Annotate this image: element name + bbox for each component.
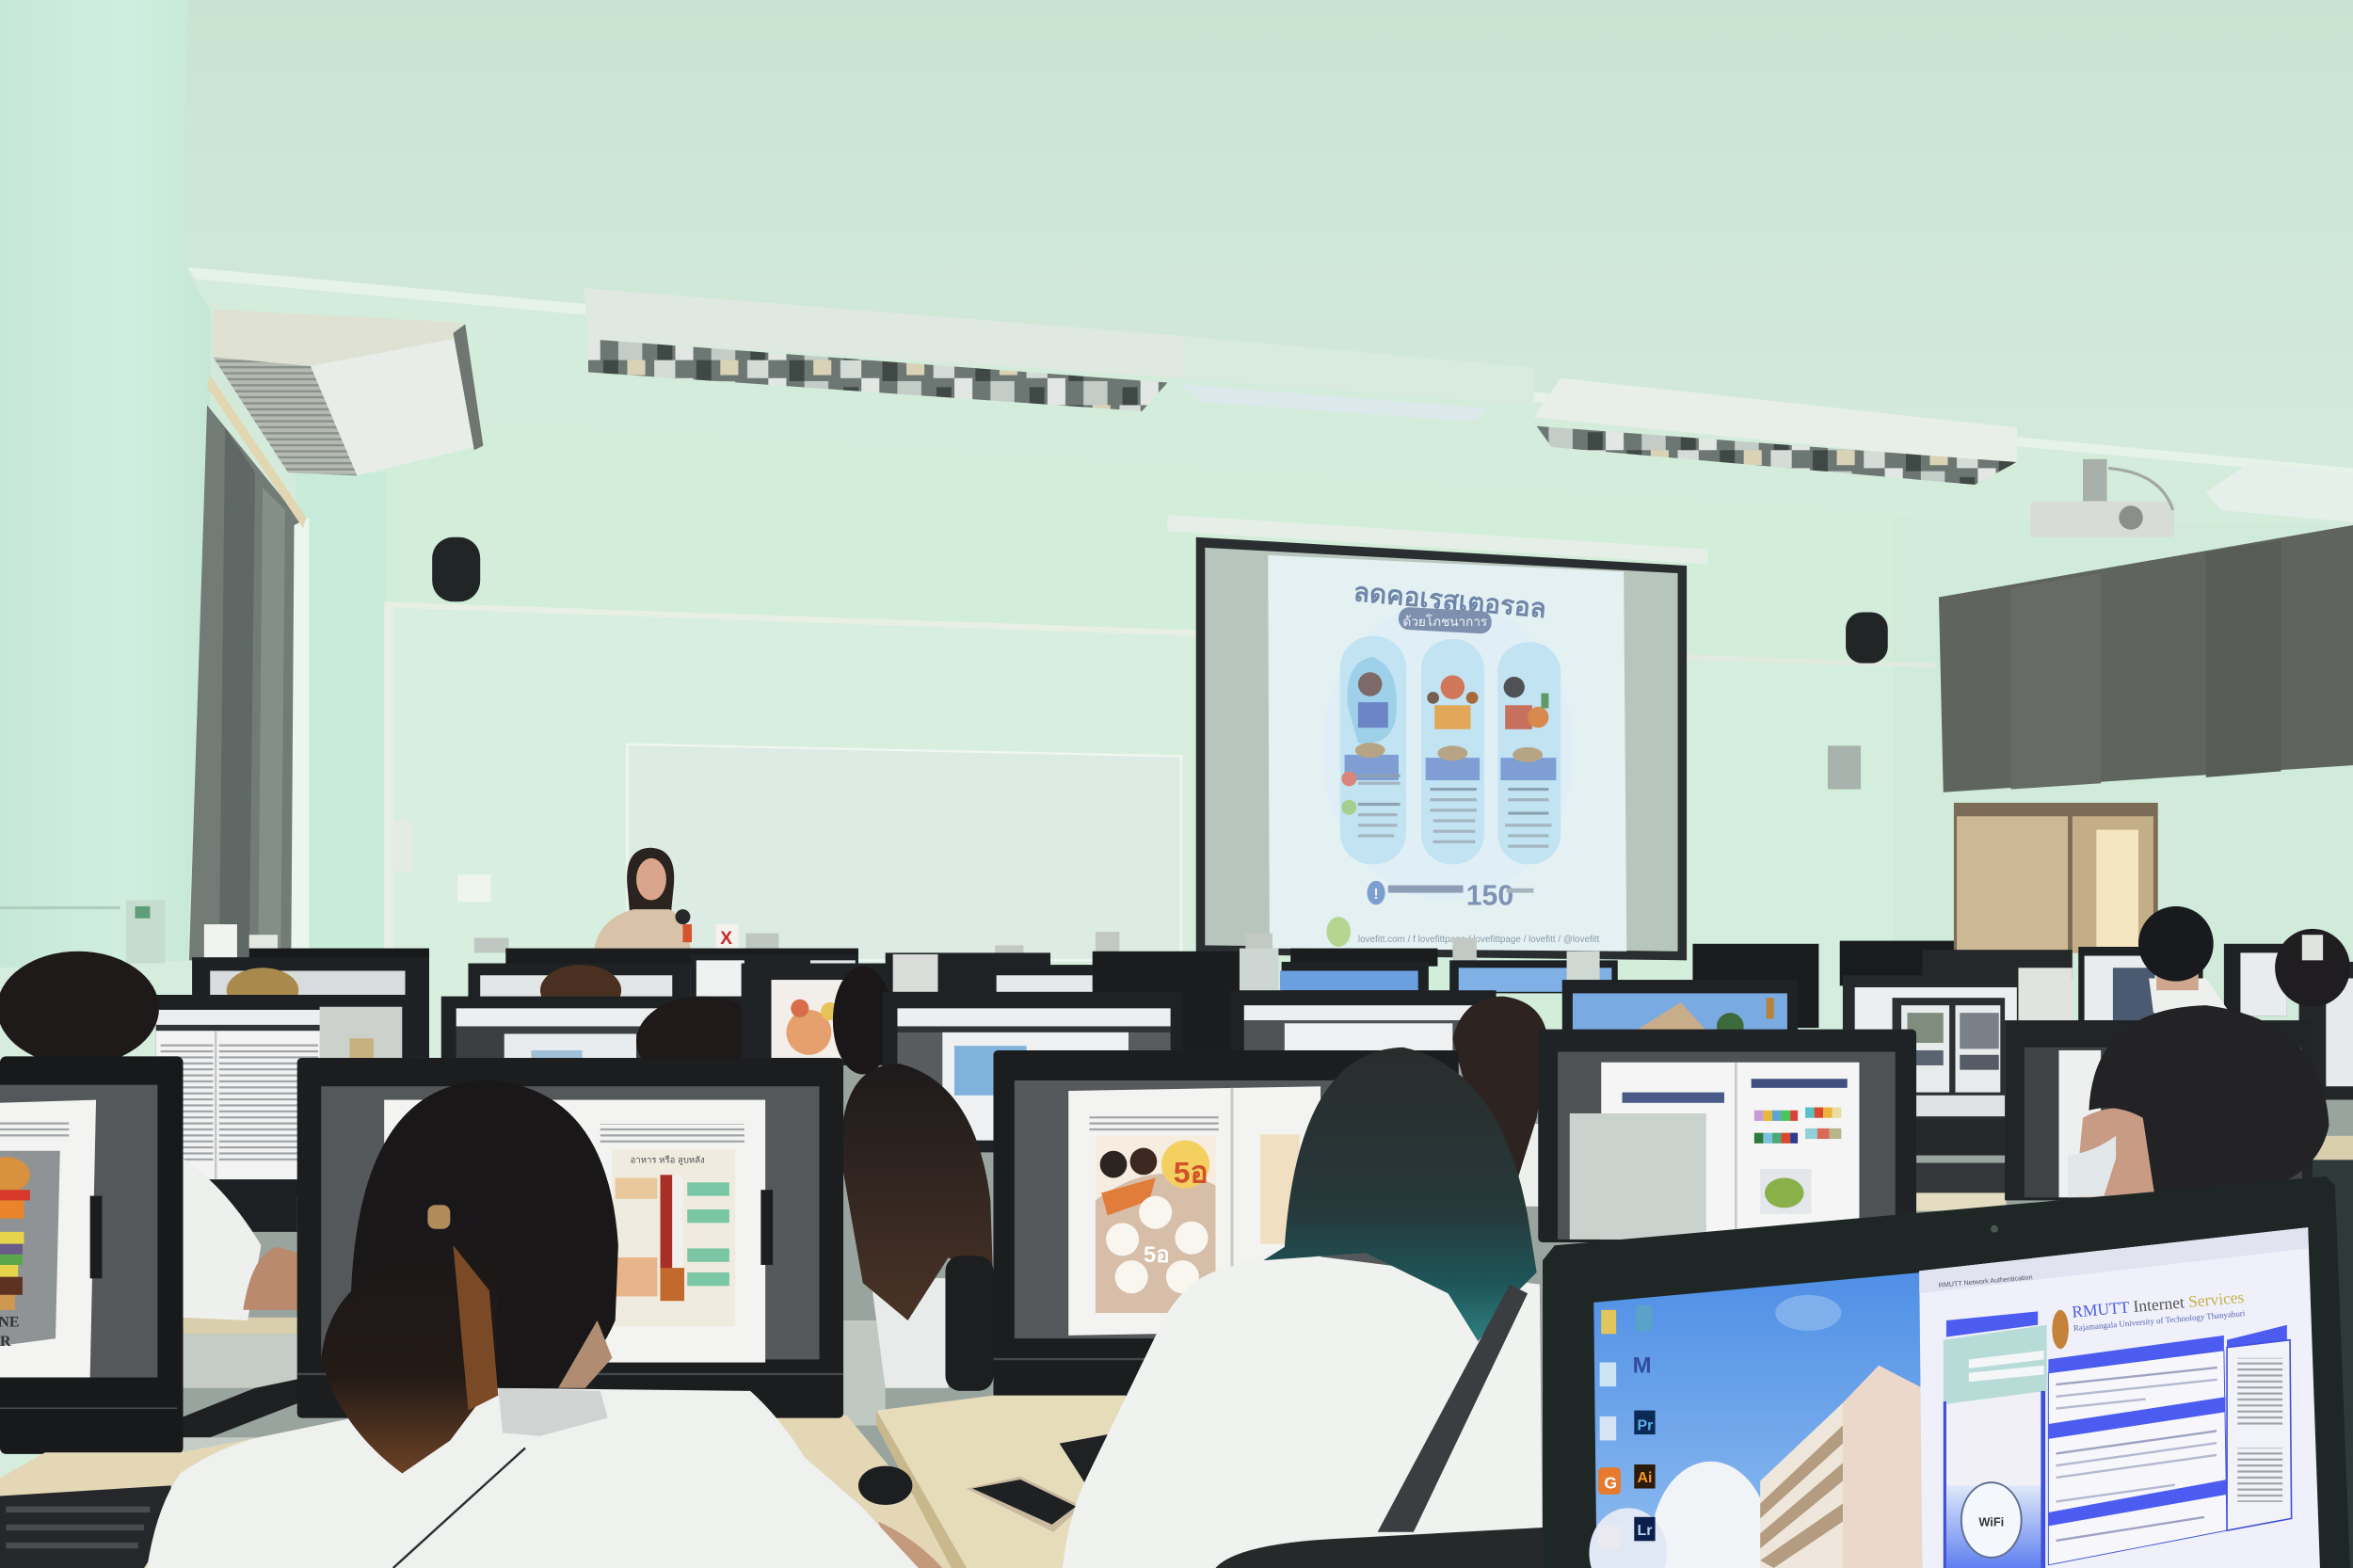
slide subtitle pill: ด้วยโภชนาการ [1403, 614, 1487, 629]
projection screen [1167, 515, 1707, 960]
speaker right [1846, 612, 1888, 664]
main content column [2048, 1336, 2227, 1565]
desktop icons: Pr [1637, 1417, 1653, 1433]
salad plate [1760, 1169, 1811, 1214]
speaker left [432, 537, 480, 601]
colour palettes [1754, 1108, 1841, 1144]
air conditioner [207, 309, 483, 528]
standing man at back right [2138, 906, 2230, 1013]
desk left [0, 1412, 960, 1568]
second row monitors middle [441, 964, 1497, 1152]
mouse [858, 1466, 912, 1505]
large monitor left with burger infographic: R [0, 1334, 11, 1350]
doors [1954, 803, 2158, 952]
slide capsule 2 [1421, 639, 1484, 864]
desktop icons: G [1604, 1474, 1617, 1493]
beam underside and lower ceiling [187, 267, 2353, 540]
slide footer: lovefitt.com / f lovefittpage / lovefittpage / lovefitt / @lovefitt [1358, 935, 1600, 945]
desktop icons: Lr [1637, 1523, 1652, 1539]
browser address text: RMUTT Network Authentication [1938, 1273, 2033, 1289]
desktop icons [1598, 1305, 1656, 1548]
ceiling soffit [0, 0, 2353, 631]
back row monitors [192, 941, 2287, 1060]
desk signs: X [720, 929, 732, 949]
desk signs [204, 924, 1477, 967]
slide [1268, 555, 1626, 952]
student at far right [2275, 929, 2350, 1007]
slide exercise note [1367, 880, 1533, 911]
front student with ponytail [147, 1080, 942, 1568]
long hair student [840, 1064, 993, 1391]
sidebar [2227, 1325, 2292, 1530]
login panel [1944, 1311, 2047, 1568]
whiteboard [627, 744, 1181, 960]
large monitor second [297, 1058, 843, 1418]
cigarette infographic [613, 1149, 735, 1326]
base behind desks [150, 1058, 2353, 1568]
slide title: ลดคอเรสเตอรอล [1353, 577, 1547, 623]
site title: Rajamangala University of Technology Thanyaburi [2073, 1308, 2246, 1333]
left column [0, 0, 210, 968]
student with dark hair far-mid [1452, 997, 1548, 1207]
teal hair student [1063, 1048, 1543, 1568]
slide exercise note: 150 [1466, 880, 1513, 911]
food infographic [1096, 1136, 1215, 1313]
slide footer [1326, 917, 1600, 947]
left curtain [189, 405, 309, 960]
browser window [1919, 1227, 2320, 1568]
login panel: WiFi [1978, 1514, 2004, 1528]
large monitor centre with food infographic [993, 1050, 1459, 1400]
cigarette infographic: อาหาร หรือ ลูบหลัง [631, 1156, 705, 1166]
back wall [296, 412, 2353, 1080]
presenter [594, 848, 692, 949]
second row monitors right [1562, 962, 2353, 1211]
desktop icons: Ai [1637, 1470, 1652, 1486]
wall thermostats [126, 819, 490, 964]
food infographic: 5อ [1144, 1242, 1170, 1268]
projector [2030, 459, 2174, 537]
left student [0, 952, 298, 1320]
food infographic: 5อ [1174, 1155, 1209, 1189]
slide capsule 3 [1497, 642, 1561, 864]
phone [967, 1477, 1082, 1532]
desktop icons: M [1633, 1353, 1652, 1379]
second row monitor left [156, 995, 411, 1232]
keyboard [0, 1485, 171, 1568]
front right monitor [1543, 1176, 2350, 1568]
site title: RMUTT Internet Services [2071, 1288, 2245, 1321]
right curtain [1939, 525, 2353, 792]
slide exercise note: ! [1373, 887, 1379, 903]
centre desk [876, 1396, 1212, 1568]
right student with mask [2068, 1005, 2329, 1197]
ceiling light fixtures [584, 288, 2353, 522]
small wall box [1828, 745, 1861, 790]
crest [2052, 1310, 2069, 1349]
burger infographic card [0, 1151, 60, 1346]
left desk strip and chair arm [177, 1318, 300, 1452]
slide subtitle pill [1398, 607, 1492, 634]
distant student heads [227, 965, 621, 1016]
wall rail [384, 601, 1936, 960]
centre-right monitor [1538, 1030, 1916, 1242]
large monitor left with burger infographic [0, 1056, 184, 1454]
desktop wallpaper [1589, 1272, 1922, 1568]
slide capsule 1 [1340, 636, 1406, 864]
